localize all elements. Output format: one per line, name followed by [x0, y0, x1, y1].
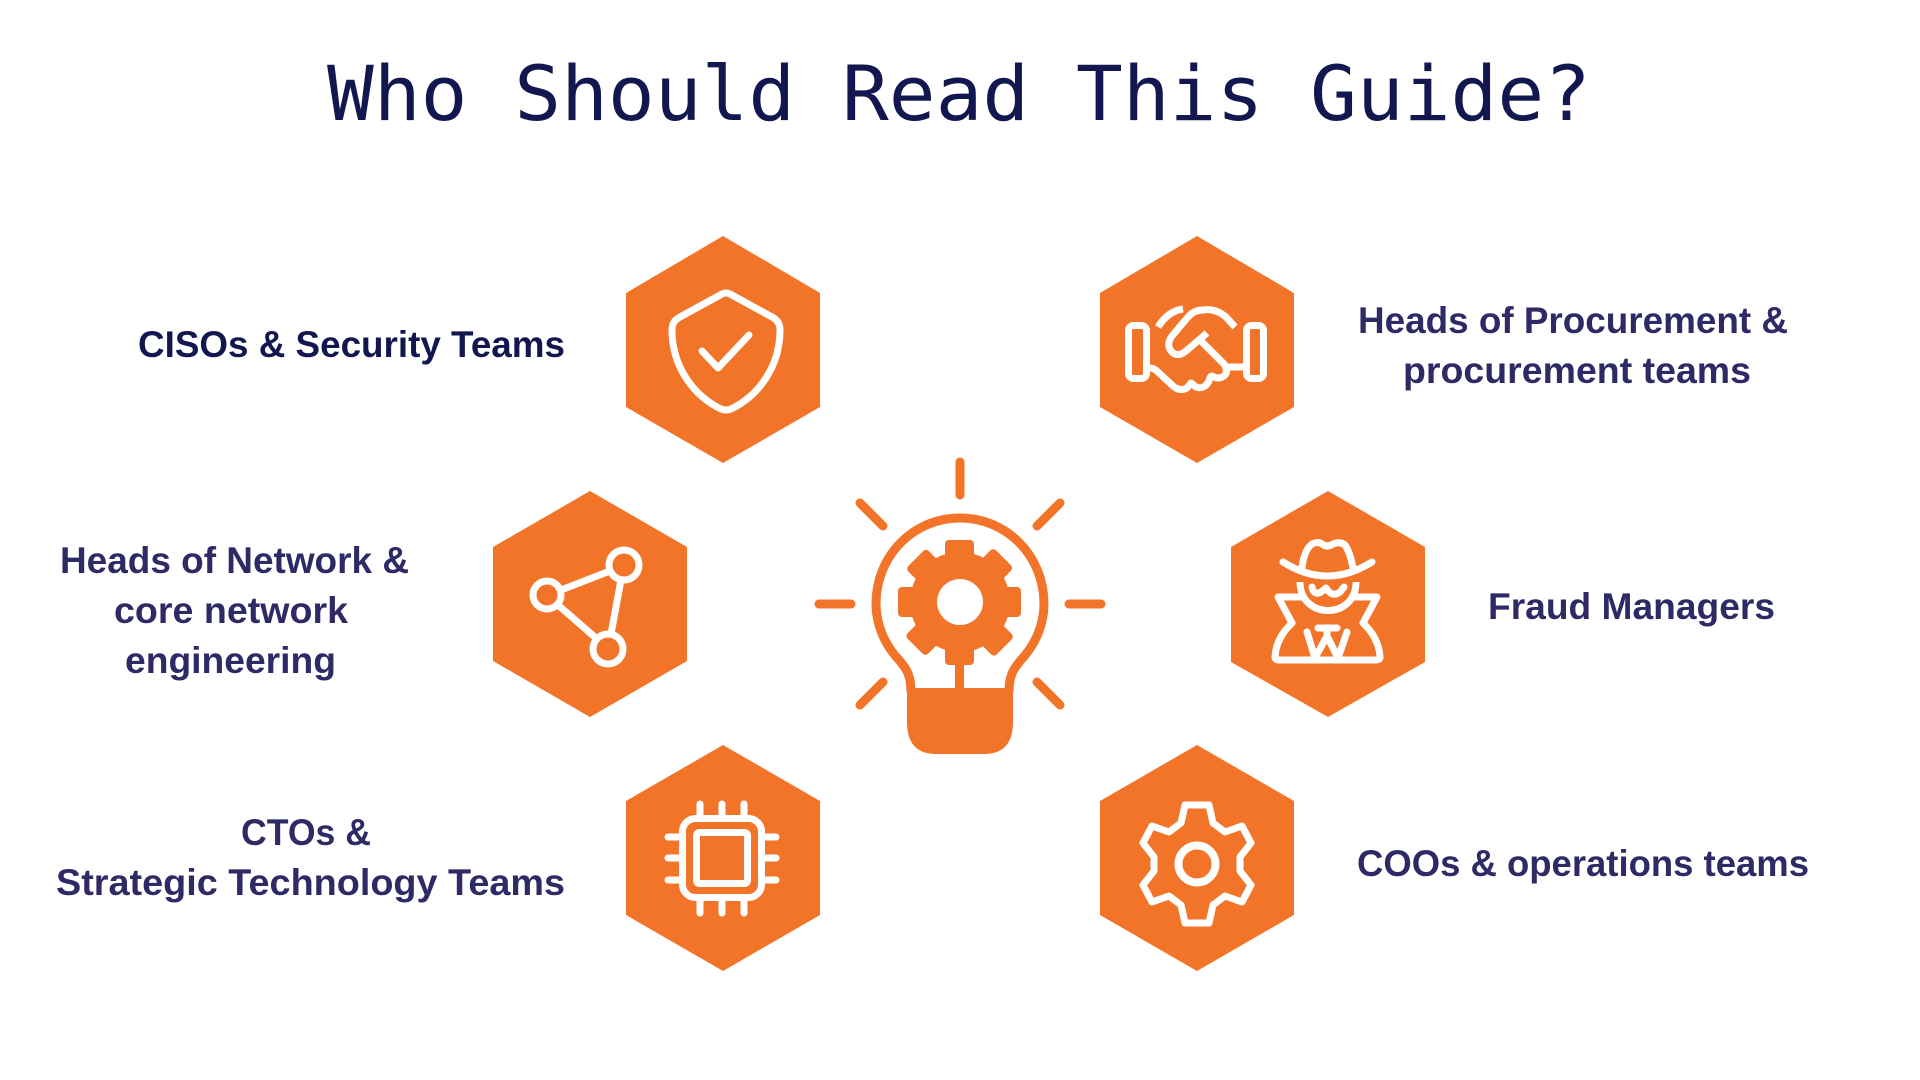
title: Who Should Read This Guide? [327, 49, 1591, 138]
hexagon icon: microchip [626, 745, 820, 971]
icon: bulb stem [955, 660, 964, 690]
label: CTOs & Strategic Technology Teams [56, 812, 565, 903]
label: CTOs & Strategic Technology Teams: CTOs & [241, 812, 371, 853]
label: Heads of Procurement & procurement teams: Heads of Procurement & [1358, 300, 1788, 341]
icon: bulb outline [876, 518, 1044, 692]
icon: cog inside bulb [898, 540, 1021, 665]
hexagon icon: settings gear [1100, 745, 1294, 971]
label: Heads of Network & core network engineering: Heads of Network & [60, 540, 409, 581]
hexagon icon: shield [626, 236, 820, 463]
label: CTOs & Strategic Technology Teams: Strategic Technology Teams [56, 862, 565, 903]
hexagon icon: spy [1231, 491, 1425, 717]
label: Heads of Procurement & procurement teams [1358, 300, 1788, 391]
hexagon icon: network nodes [493, 491, 687, 717]
icon: light rays [819, 462, 1101, 705]
label: Heads of Network & core network engineering [60, 540, 409, 681]
hexagon icon: handshake [1100, 236, 1294, 463]
icon: bulb base [907, 688, 1013, 754]
label: Heads of Network & core network engineering: engineering [125, 640, 336, 681]
label: CISOs & Security Teams: CISOs & Security Teams [138, 324, 565, 365]
label: Heads of Network & core network engineering: core network [114, 590, 348, 631]
central lightbulb icon [819, 462, 1101, 754]
label: Fraud Managers: Fraud Managers [1488, 586, 1775, 627]
label: Heads of Procurement & procurement teams: procurement teams [1403, 350, 1751, 391]
label: COOs & operations teams: COOs & operations teams [1357, 843, 1809, 884]
